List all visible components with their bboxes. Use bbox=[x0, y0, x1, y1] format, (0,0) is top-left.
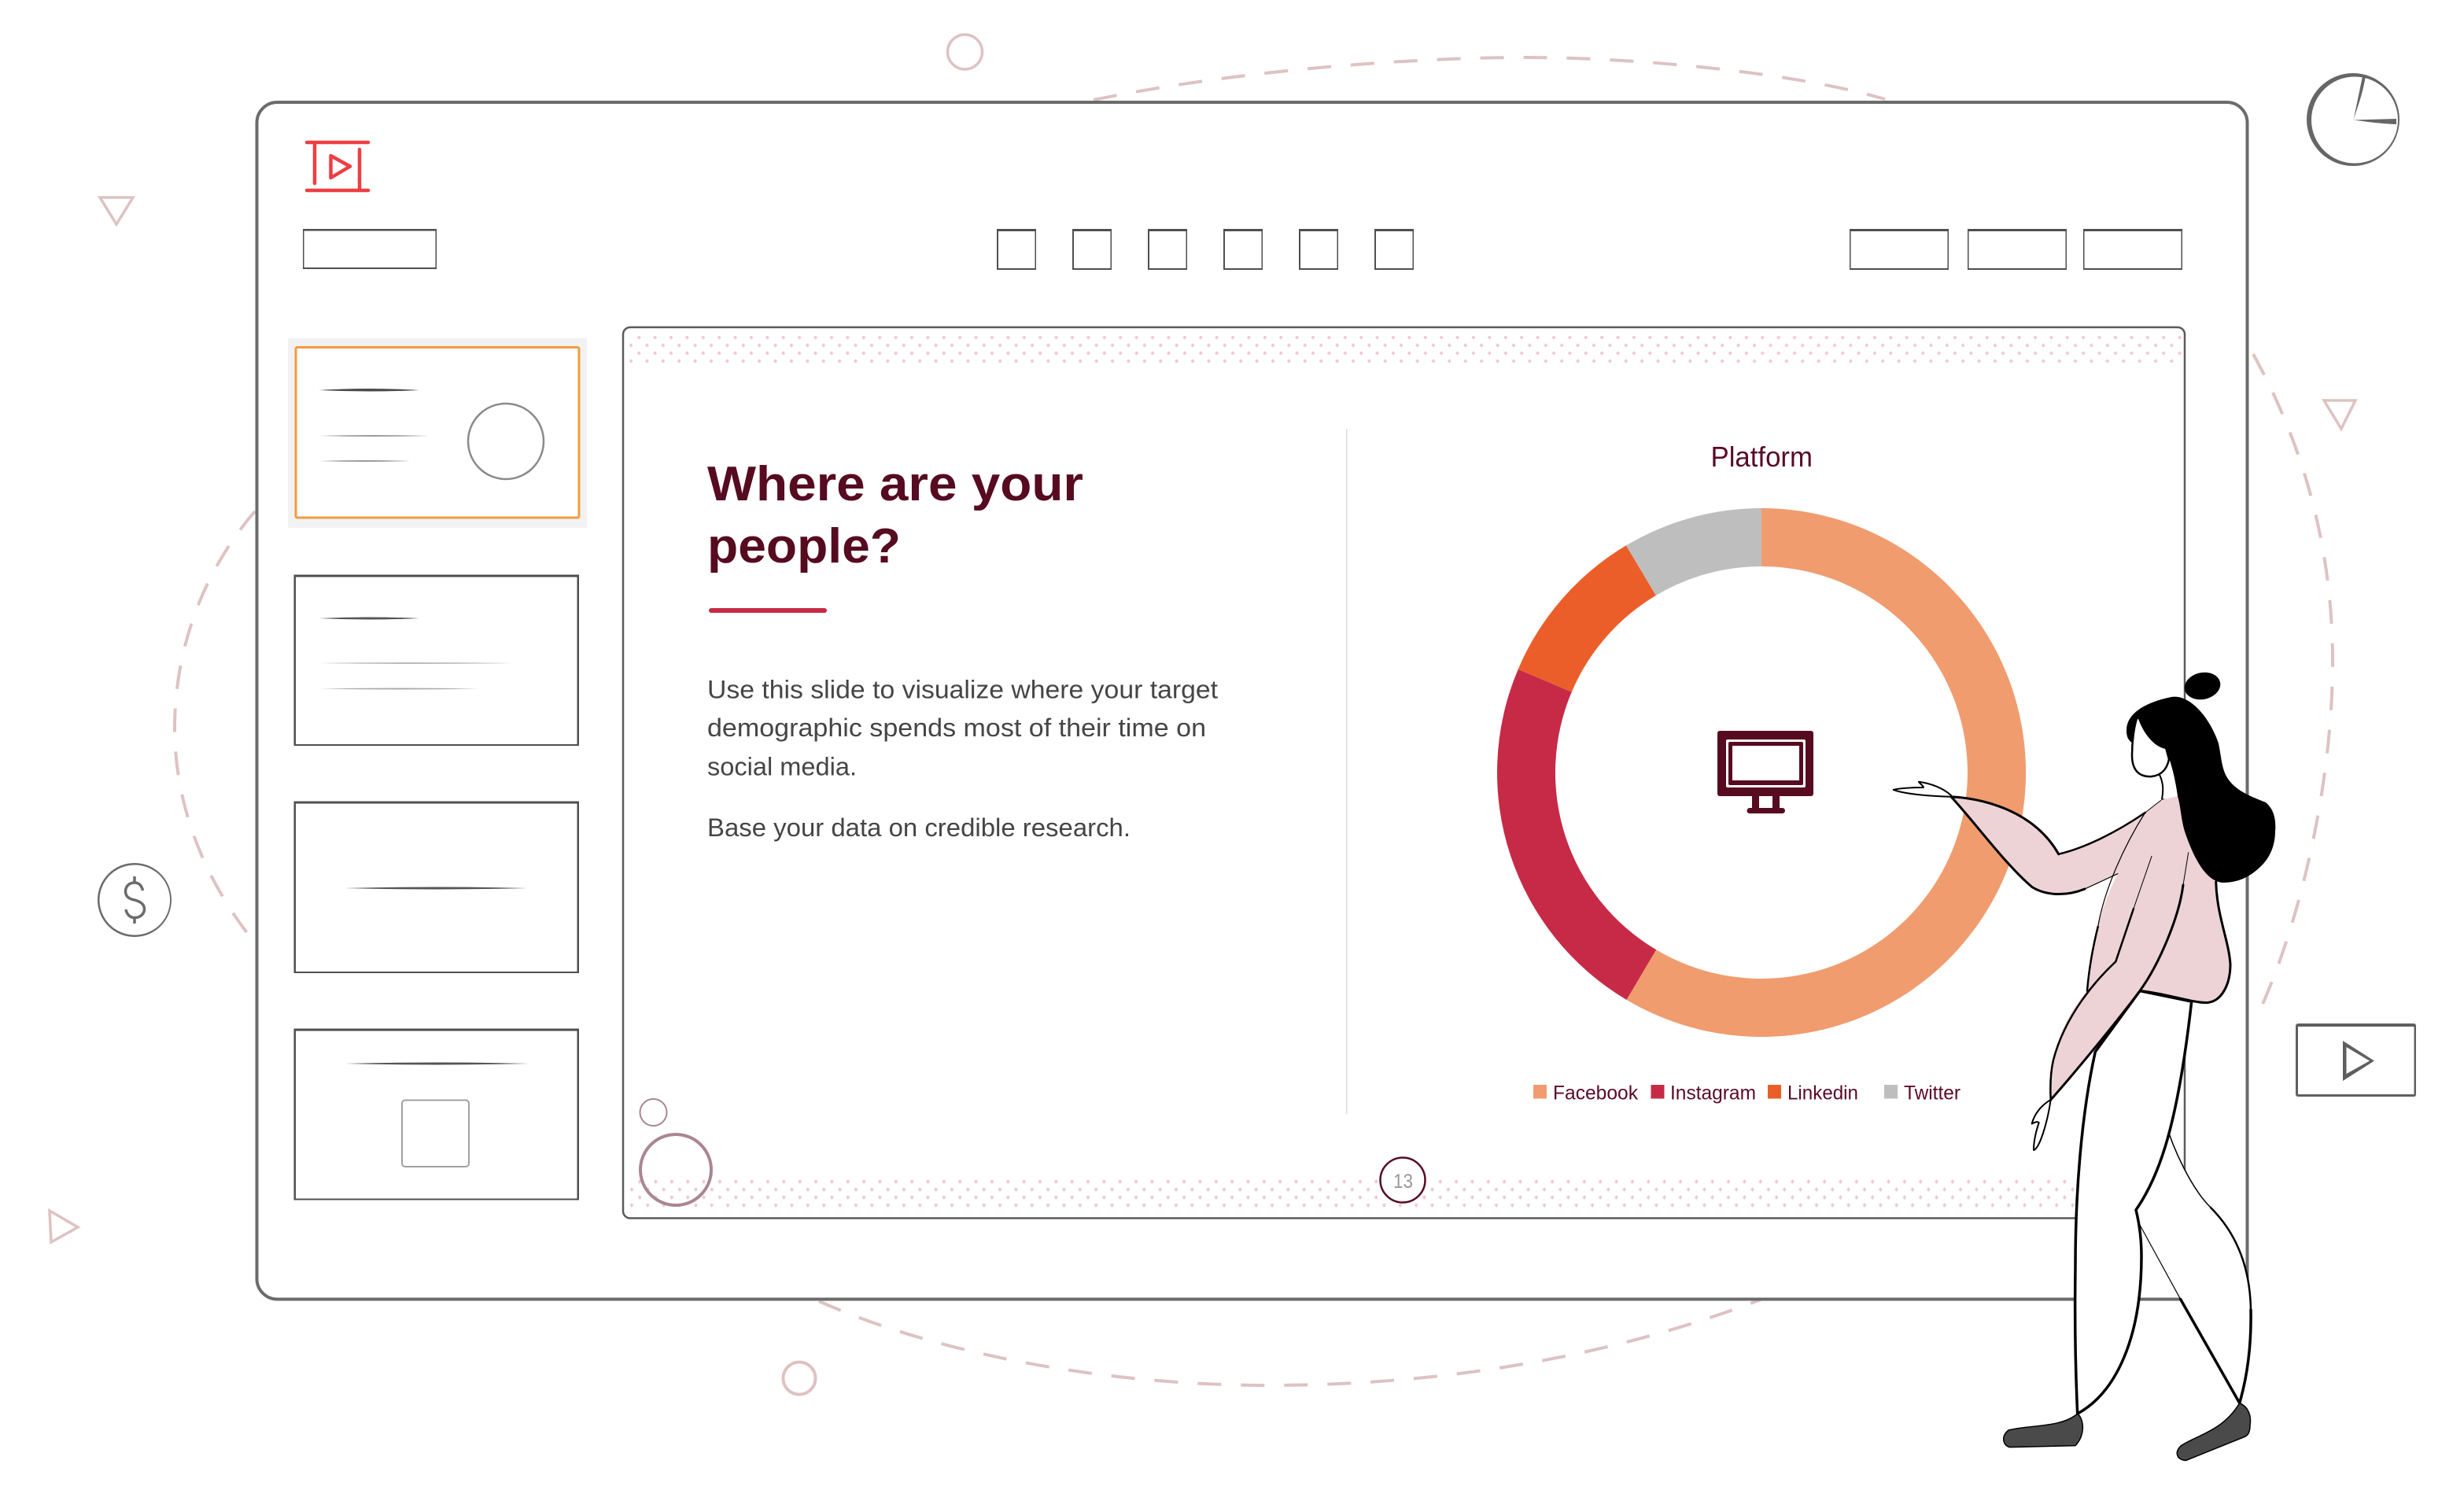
page number badge bbox=[1380, 1158, 1426, 1202]
back leg bbox=[2136, 1121, 2251, 1403]
decorative circle: top bbox=[947, 35, 982, 69]
body text: Base your data on credible research. bbox=[707, 813, 1131, 842]
segment: Instagram bbox=[1497, 669, 1656, 1000]
title bbox=[707, 457, 1083, 573]
front leg bbox=[2075, 991, 2192, 1414]
icon: desktop monitor bbox=[1717, 731, 1813, 813]
background dashed arcs bbox=[175, 57, 2333, 1385]
hair bbox=[2126, 697, 2275, 883]
page number badge: 13 bbox=[1393, 1171, 1413, 1193]
title underline bbox=[709, 608, 827, 613]
donut chart bbox=[1497, 508, 2026, 1037]
icon: pie chart clock bbox=[2307, 73, 2399, 166]
hair bun bbox=[2182, 669, 2223, 703]
pointing hand bbox=[1894, 782, 1951, 797]
panel: app window frame bbox=[256, 102, 2247, 1300]
toolbar: three right buttons bbox=[1850, 229, 2182, 270]
decorative triangle: lower left bbox=[50, 1211, 78, 1242]
segment: Twitter bbox=[1626, 508, 1761, 596]
toolbar button: left bbox=[303, 229, 437, 269]
title: Where are your bbox=[707, 457, 1083, 511]
title: people? bbox=[707, 519, 901, 573]
chart title: Platform bbox=[1710, 441, 1813, 473]
shoe: left bbox=[2004, 1414, 2082, 1448]
sweater bbox=[1951, 796, 2230, 1100]
decorative triangle: upper right bbox=[2324, 400, 2355, 429]
body text bbox=[707, 675, 1218, 842]
decorative circle: bottom bbox=[784, 1363, 815, 1394]
slide thumbnail 3 bbox=[294, 801, 579, 973]
slide thumbnail 4 bbox=[294, 1029, 579, 1200]
neck bbox=[2160, 759, 2179, 800]
neck outline bbox=[2160, 775, 2179, 800]
toolbar: six square tools bbox=[997, 229, 1414, 270]
lower hand bbox=[2032, 1100, 2051, 1150]
illustration: woman pointing at chart bbox=[1894, 669, 2275, 1460]
slide column divider bbox=[1346, 429, 1347, 1114]
decorative circles on slide bbox=[640, 1099, 711, 1205]
top dotted band bbox=[629, 336, 2182, 365]
shoe: right bbox=[2177, 1403, 2250, 1460]
bottom dotted band bbox=[629, 1178, 2077, 1210]
icon: video player bbox=[2296, 1023, 2416, 1097]
body text: social media. bbox=[707, 752, 857, 780]
chart legend: Twitter bbox=[1904, 1082, 1961, 1105]
icon: dollar coin bbox=[98, 863, 172, 937]
face bbox=[2132, 717, 2169, 776]
chart legend: Facebook bbox=[1553, 1082, 1638, 1105]
body text: Use this slide to visualize where your target bbox=[707, 675, 1218, 703]
chart legend: Instagram bbox=[1670, 1082, 1756, 1105]
slide thumbnail 2 bbox=[294, 574, 579, 746]
slide thumbnail 1: selected bbox=[288, 338, 587, 528]
segment: Linkedin bbox=[1518, 545, 1656, 692]
chart legend: Linkedin bbox=[1787, 1082, 1858, 1105]
segment: Facebook bbox=[1627, 508, 2026, 1037]
back leg outlines bbox=[2138, 1121, 2251, 1403]
sweater outlines bbox=[1951, 797, 2230, 1100]
decorative triangle: upper left bbox=[100, 197, 133, 224]
chart legend bbox=[1533, 1082, 1961, 1105]
panel: main slide bbox=[623, 327, 2185, 1218]
body text: demographic spends most of their time on bbox=[707, 714, 1206, 742]
logo: video play mark bbox=[307, 142, 368, 190]
